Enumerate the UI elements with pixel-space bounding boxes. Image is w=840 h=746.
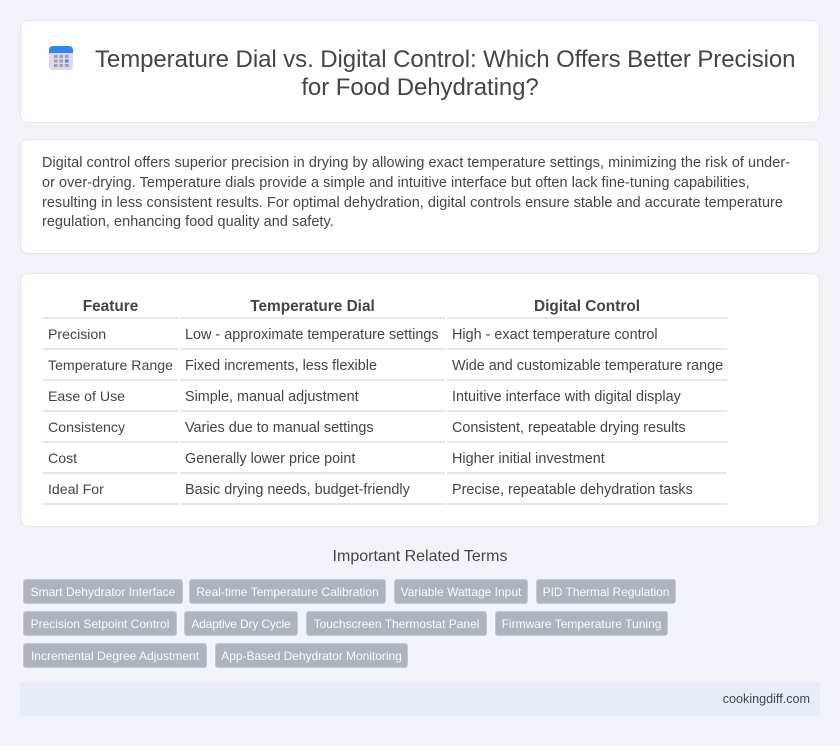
summary text: resulting in less consistent results. For optimal dehydration, digital controls ensure stable and accurate temperature [42,195,783,211]
row: precision: Precision [48,326,106,342]
panel: summary card [20,139,820,254]
row: precision: High - exact temperature control [452,327,658,343]
tags: related terms: App-Based Dehydrator Monitoring [221,649,402,663]
row: cost: Higher initial investment [452,451,605,467]
tags: related terms: Precision Setpoint Control [31,617,169,631]
row: ease of use: Simple, manual adjustment [185,389,359,405]
footer bar [20,682,820,716]
summary text: regulation, enhancing food quality and safety. [42,214,334,230]
row: ideal for: Basic drying needs, budget-friendly [185,482,410,498]
row: ease of use [48,388,681,405]
table header: Temperature Dial [250,298,375,315]
table header: Digital Control [534,298,640,315]
row: cost [48,450,605,467]
tags: related terms: PID Thermal Regulation [543,585,669,599]
tags: related terms: Incremental Degree Adjustment [31,649,199,663]
row: temperature range [48,357,723,374]
table header [83,298,640,315]
summary text: or over-drying. Temperature dials provide a simple and intuitive interface but often lack fine-tuning capabilities, [42,175,750,191]
row: consistency: Varies due to manual settings [185,420,374,436]
table header: Feature [83,298,138,315]
tags: related terms: Variable Wattage Input [401,585,521,599]
row: consistency: Consistent, repeatable drying results [452,420,686,436]
row: ease of use: Intuitive interface with digital display [452,389,681,405]
row: cost: Generally lower price point [185,451,355,467]
tags: related terms: Firmware Temperature Tuning [502,617,661,631]
tags: related terms: Adaptive Dry Cycle [191,617,291,631]
row: temperature range: Wide and customizable temperature range [452,358,723,374]
row: consistency [48,419,686,436]
title: for Food Dehydrating? [301,74,539,101]
row: consistency: Consistency [48,419,125,435]
heading: related terms: Important Related Terms [333,548,507,565]
row: precision [48,326,658,343]
tags: related terms: Real-time Temperature Calibration [196,585,379,599]
title [95,46,795,101]
panel: title card [20,20,820,123]
icon: calendar [49,46,73,70]
row: ease of use: Ease of Use [48,388,125,404]
tags: related terms: Smart Dehydrator Interface [31,585,175,599]
row: precision: Low - approximate temperature settings [185,327,439,343]
tags: related terms: Touchscreen Thermostat Panel [314,617,479,631]
summary text: Digital control offers superior precision in drying by allowing exact temperature settings, minimizing the risk of under- [42,155,790,171]
row: ideal for: Ideal For [48,481,104,497]
summary text [42,155,790,230]
footer credit: cookingdiff.com [723,692,810,706]
row: temperature range: Fixed increments, less flexible [185,358,377,374]
row: temperature range: Temperature Range [48,357,173,373]
row: ideal for: Precise, repeatable dehydration tasks [452,482,693,498]
row: cost: Cost [48,450,77,466]
panel: comparison table [20,273,820,527]
title: Temperature Dial vs. Digital Control: Which Offers Better Precision [95,46,795,73]
tags: related terms [23,579,676,668]
row: ideal for [48,481,693,498]
